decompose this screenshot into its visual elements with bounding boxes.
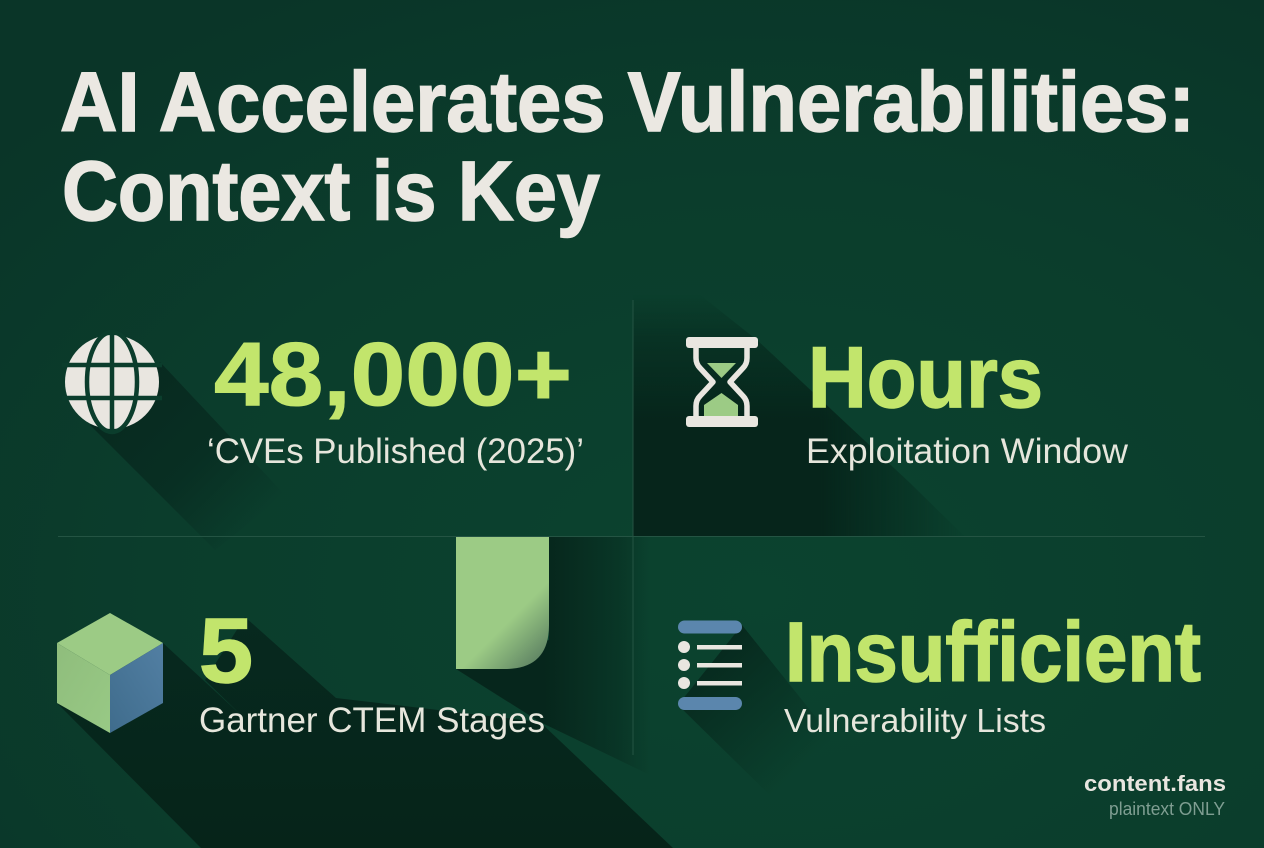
icon: globe xyxy=(62,332,162,432)
label: exploitation window: Exploitation Window xyxy=(806,432,1129,471)
label: CVEs published: ‘CVEs Published (2025)’ xyxy=(207,432,584,471)
decorative green tab xyxy=(456,537,549,669)
shadow: list xyxy=(678,625,850,815)
panel: exploitation window xyxy=(686,330,1129,471)
icon: hourglass xyxy=(686,337,758,427)
panel: vulnerability lists xyxy=(678,605,1201,739)
footer: brand: content.fans xyxy=(1084,771,1226,796)
label: CTEM stages: Gartner CTEM Stages xyxy=(199,701,545,740)
footer: brand: plaintext ONLY xyxy=(1109,799,1225,819)
stat: 5: 5 xyxy=(199,600,253,702)
stat: Hours: Hours xyxy=(808,330,1043,426)
stat: 48,000+: 48,000+ xyxy=(214,325,572,425)
title: AI Accelerates Vulnerabilities: xyxy=(60,55,1195,149)
title xyxy=(60,55,1195,238)
label: vulnerability lists: Vulnerability Lists xyxy=(784,702,1046,739)
title: Context is Key xyxy=(62,144,600,238)
shadow: hourglass xyxy=(634,321,925,536)
shadow: cube and number 5 xyxy=(57,617,673,848)
shadow: rectangle xyxy=(456,537,650,775)
icon: list xyxy=(678,620,742,710)
shadow: globe xyxy=(90,362,285,550)
panel: CVEs published xyxy=(62,325,584,471)
stat: Insufficient: Insufficient xyxy=(785,605,1201,699)
quadrant dividers xyxy=(58,300,1205,755)
footer: brand xyxy=(1084,771,1226,819)
icon: cube xyxy=(57,613,163,733)
panel: CTEM stages xyxy=(57,537,549,740)
